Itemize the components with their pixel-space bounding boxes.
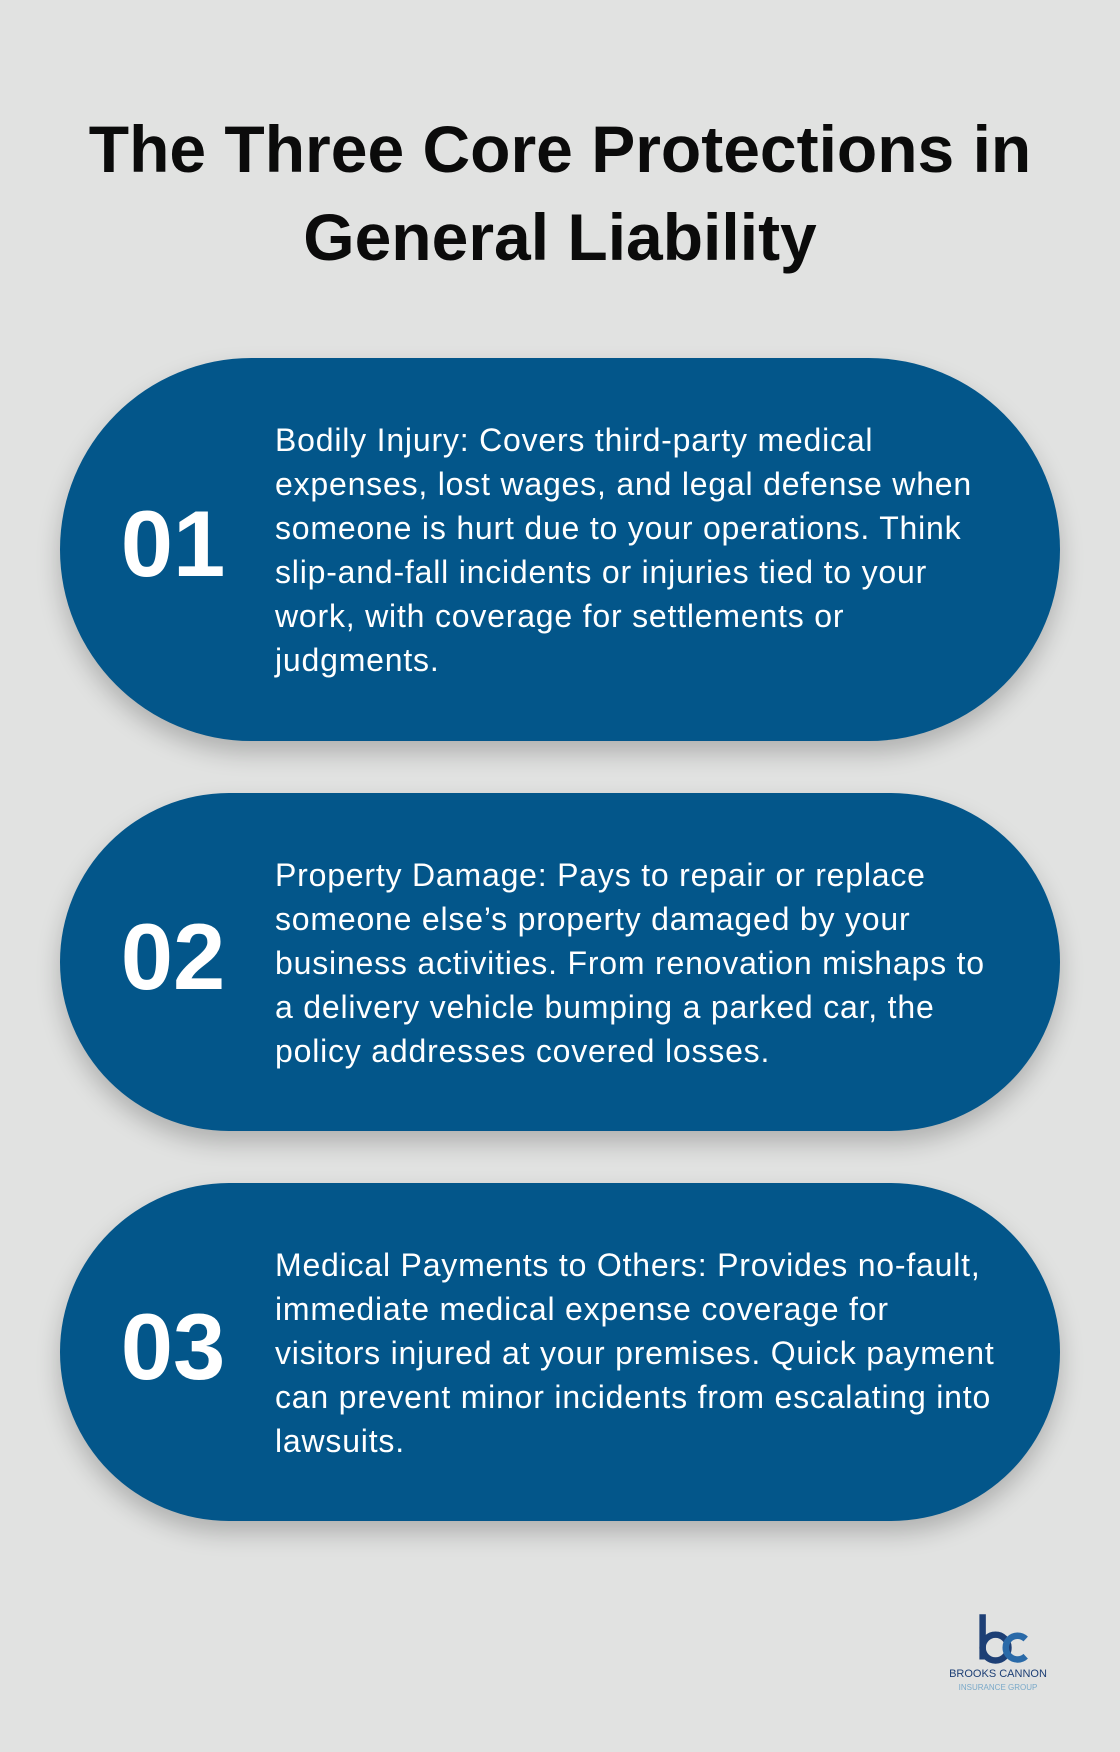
title: The Three Core Protections in — [89, 112, 1031, 186]
logo text: INSURANCE GROUP — [959, 1683, 1037, 1692]
title — [89, 112, 1031, 274]
text: medical payments: can prevent minor incidents from escalating into — [275, 1379, 991, 1415]
logo text — [949, 1668, 1047, 1692]
text: medical payments: Medical Payments to Others: Provides no-fault, — [275, 1247, 981, 1283]
text: bodily injury: judgments. — [275, 642, 440, 678]
text: bodily injury: work, with coverage for settlements or — [275, 598, 844, 634]
title: General Liability — [303, 200, 817, 274]
number 03: 03 — [121, 1294, 225, 1399]
text: bodily injury: Bodily Injury: Covers third-party medical — [275, 422, 873, 458]
text: medical payments: lawsuits. — [275, 1423, 405, 1459]
text: bodily injury: slip-and-fall incidents or injuries tied to your — [275, 554, 927, 590]
text: medical payments — [275, 1247, 995, 1459]
text: bodily injury: expenses, lost wages, and legal defense when — [275, 466, 972, 502]
icon: bc mark — [979, 1614, 1028, 1664]
panel: property damage — [60, 793, 1060, 1131]
text: medical payments: immediate medical expense coverage for — [275, 1291, 889, 1327]
text: property damage: policy addresses covered losses. — [275, 1033, 770, 1069]
text: property damage: business activities. From renovation mishaps to — [275, 945, 985, 981]
text: property damage: Property Damage: Pays to repair or replace — [275, 857, 926, 893]
number 02: 02 — [121, 904, 225, 1009]
logo — [949, 1614, 1047, 1692]
text: bodily injury — [274, 422, 972, 678]
text: property damage: someone else’s property damaged by your — [275, 901, 910, 937]
panel: bodily injury — [60, 358, 1060, 741]
text: property damage: a delivery vehicle bumping a parked car, the — [275, 989, 935, 1025]
panel: medical payments — [60, 1183, 1060, 1521]
logo text: BROOKS CANNON — [949, 1668, 1047, 1680]
text: medical payments: visitors injured at your premises. Quick payment — [275, 1335, 995, 1371]
text: bodily injury: someone is hurt due to your operations. Think — [275, 510, 961, 546]
number 01: 01 — [121, 491, 225, 596]
text: property damage — [275, 857, 985, 1069]
